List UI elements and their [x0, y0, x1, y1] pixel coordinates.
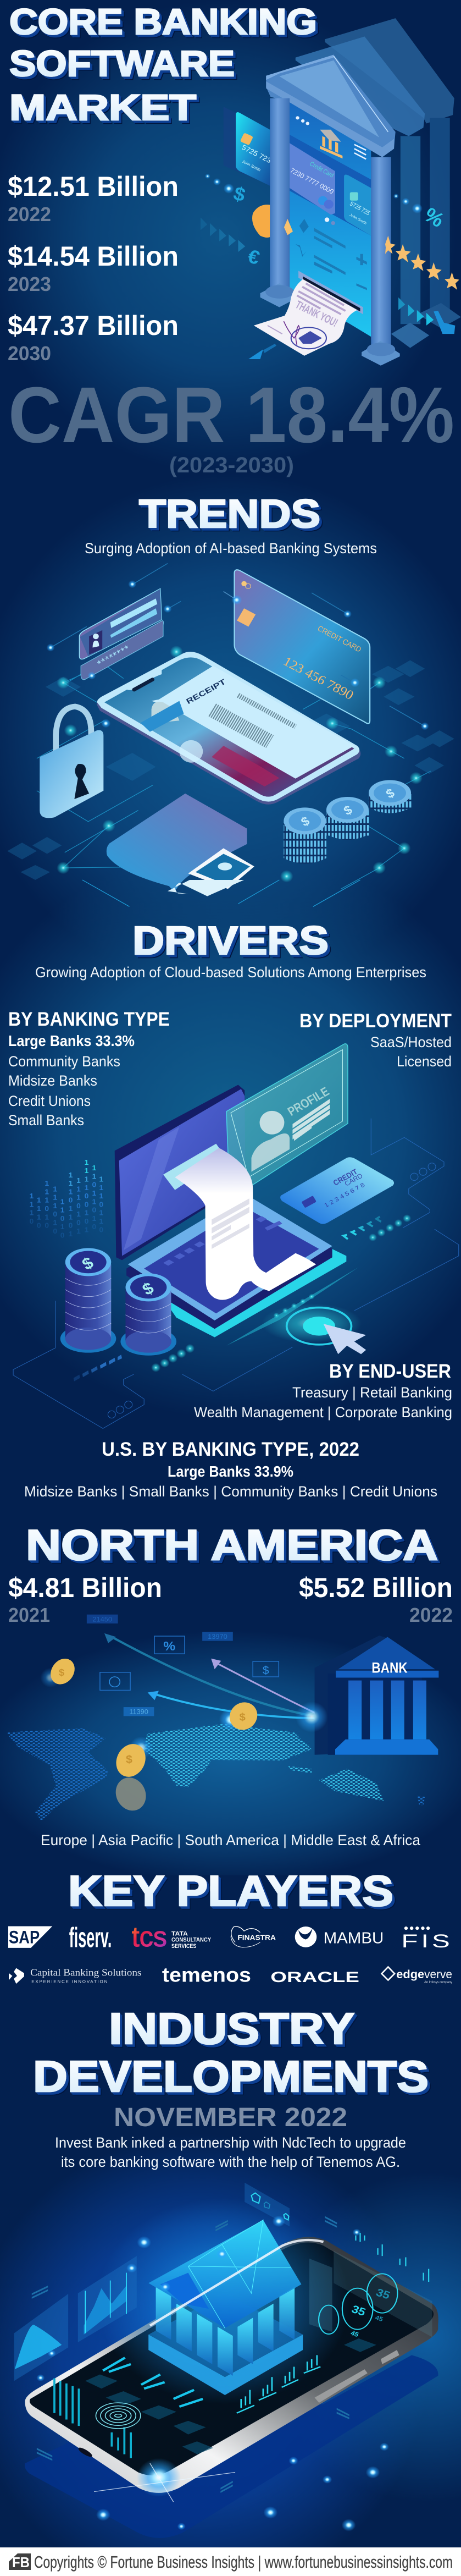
logo: EdgeVerve: verve	[424, 1967, 452, 1981]
regions list: Europe | Asia Pacific | South America | Middle East & Africa	[41, 1832, 420, 1848]
value 2030	[8, 310, 179, 365]
value 2022: $5.52 Billion	[299, 1572, 453, 1603]
binary data columns: 1	[45, 1196, 49, 1204]
binary data columns: 0	[76, 1219, 81, 1226]
binary data columns: 1	[30, 1192, 34, 1200]
binary data columns: 1	[30, 1201, 34, 1208]
dial gauges right: 35	[374, 2287, 392, 2302]
padlock	[40, 707, 103, 818]
binary data columns: 1	[69, 1188, 73, 1196]
segment: by banking type: Community Banks	[8, 1053, 120, 1070]
binary data columns: 1	[85, 1166, 89, 1175]
value 2021: 2021	[8, 1604, 50, 1626]
binary data columns: 1	[37, 1196, 41, 1204]
binary data columns: 1	[76, 1193, 81, 1202]
screen bars and fingerprint	[54, 2358, 203, 2458]
company logos	[8, 1922, 453, 1986]
gold coins	[40, 1654, 328, 1815]
icon: percent sign: %	[420, 203, 448, 232]
back temple	[325, 18, 461, 328]
data tags: %	[163, 1639, 175, 1654]
logo: Mambu	[295, 1927, 384, 1947]
holographic bank	[148, 2220, 303, 2395]
binary data columns: 1	[53, 1193, 58, 1202]
value 2023: 2023	[8, 273, 51, 295]
binary data columns: 1	[76, 1176, 81, 1185]
gold coins: $	[240, 1711, 246, 1723]
hash marks	[32, 2216, 349, 2493]
heading: trends: TRENDS	[139, 492, 320, 536]
dots under coins	[74, 1344, 195, 1381]
segment: by end-user: Wealth Management | Corporate Banking	[194, 1404, 452, 1421]
credit card: 1 2 3 4 5 6 7 8	[323, 1182, 366, 1209]
tech outlines	[13, 1119, 459, 1428]
binary data columns: 1	[92, 1214, 97, 1223]
icon: gold coin	[252, 205, 270, 238]
heading: drivers: DRIVERS	[132, 919, 329, 963]
hologram glow	[97, 2198, 350, 2404]
value 2023	[8, 241, 179, 295]
data tags: $	[263, 1664, 269, 1677]
phone shadow	[25, 2355, 438, 2538]
dial gauges right: 45	[349, 2329, 360, 2338]
wallet	[107, 794, 254, 890]
data tags	[87, 1615, 279, 1716]
binary data columns: 0	[99, 1201, 103, 1208]
bank screen: 7230 7777 0000	[289, 167, 335, 196]
wallet banknotes	[82, 880, 360, 906]
credit card: 123 456 7890	[281, 654, 356, 703]
phone edge highlight	[150, 2240, 324, 2326]
title	[9, 1, 317, 128]
laptop screen	[115, 1085, 246, 1260]
CAGR figure: (2023-2030)	[169, 453, 294, 477]
value 2023: $14.54 Billion	[8, 241, 179, 272]
binary data columns: 1	[76, 1210, 81, 1218]
heading: industry developments: DEVELOPMENTS	[33, 2052, 429, 2101]
illustration: world map, bank and coins	[6, 1615, 438, 1821]
segment: by deployment: SaaS/Hosted	[370, 1034, 452, 1050]
binary data columns: 0	[30, 1217, 34, 1225]
binary data columns: 1	[45, 1213, 49, 1221]
stack 2: $	[341, 802, 355, 818]
binary data columns: 0	[37, 1221, 41, 1230]
footer	[0, 2547, 461, 2576]
value 2022: 2022	[8, 203, 51, 225]
logo: Capital Banking Solutions: EXPERIENCE INNOVATION	[31, 1979, 108, 1984]
logo: FIS	[401, 1927, 453, 1952]
binary data columns: 1	[37, 1213, 41, 1221]
decorative tiles	[7, 660, 454, 880]
logo: FIS: FIS	[401, 1930, 453, 1952]
binary data columns: 0	[85, 1201, 88, 1208]
coin stacks	[284, 780, 412, 863]
small card	[224, 107, 273, 186]
bank building: BANK	[371, 1659, 408, 1676]
binary data columns: 1	[99, 1209, 104, 1217]
illustration: smartphone with holographic bank	[14, 2183, 438, 2538]
logo: TCS	[132, 1922, 212, 1952]
binary data columns: 1	[30, 1209, 34, 1217]
binary data columns: 1	[92, 1164, 97, 1172]
value 2030: 2030	[8, 342, 51, 365]
circuit lines	[37, 664, 431, 889]
title: SOFTWARE	[9, 43, 235, 84]
arrow: bottom left	[248, 344, 276, 359]
binary data columns: 1	[69, 1213, 73, 1221]
development text: its core banking software with the help of Tenemos AG.	[61, 2154, 400, 2170]
receipt: THANK YOU!	[293, 299, 340, 329]
binary data columns: 1	[85, 1158, 89, 1166]
segment: by banking type	[8, 1009, 170, 1129]
value 2022: 2022	[409, 1604, 453, 1626]
value 2021: $4.81 Billion	[8, 1572, 162, 1603]
small card: 5725 723	[240, 143, 273, 164]
binary data columns: 0	[53, 1227, 57, 1235]
bank screen: Credit Card	[308, 161, 335, 179]
hexagons on screen	[85, 2338, 376, 2454]
data tags: 21450	[92, 1616, 112, 1623]
binary data columns: 1	[85, 1184, 89, 1192]
bank screen: John Smith	[349, 213, 368, 225]
logo: EdgeVerve	[382, 1967, 453, 1984]
binary data columns: 1	[53, 1219, 58, 1226]
data tags: 13970	[208, 1633, 227, 1641]
binary data columns: 1	[99, 1217, 104, 1225]
binary data columns: 0	[45, 1221, 49, 1230]
binary data columns: 0	[60, 1214, 64, 1223]
development text: Invest Bank inked a partnership with NdcTech to upgrade	[55, 2134, 406, 2151]
right column	[362, 157, 400, 366]
binary data columns: 1	[99, 1192, 104, 1200]
smartphone	[97, 652, 360, 805]
binary data columns: 0	[92, 1206, 96, 1214]
logo: EdgeVerve: An Infosys company	[424, 1980, 453, 1984]
stack 2	[326, 797, 369, 840]
binary data columns: 0	[76, 1202, 81, 1210]
coin stack 2	[120, 1273, 176, 1356]
bank building	[315, 1636, 438, 1755]
footer logo: FB	[12, 2554, 30, 2571]
coin stack 1	[60, 1248, 116, 1353]
middle temple	[296, 36, 429, 348]
gold coins: $	[126, 1754, 132, 1766]
development date: NOVEMBER 2022	[114, 2103, 347, 2132]
binary data columns: 1	[85, 1209, 89, 1217]
credit card: CARD	[343, 1172, 364, 1188]
chevrons and dots right	[343, 1214, 411, 1241]
segment: U.S. by banking type: U.S. BY BANKING TYPE, 2022	[102, 1439, 359, 1460]
pediment roof	[266, 54, 396, 157]
illustration: bank with phone screen	[201, 18, 461, 366]
logo: SAP: SAP	[9, 1928, 40, 1947]
dial gauges right	[309, 2233, 432, 2338]
logo: EdgeVerve: edge	[396, 1967, 424, 1981]
icon: shopping cart	[434, 311, 455, 334]
bank screen	[289, 102, 371, 337]
light dots	[36, 2216, 389, 2531]
binary data columns: 0	[92, 1181, 96, 1189]
illustration: laptop with receipt and profile	[13, 1044, 459, 1428]
binary data columns: 1	[69, 1179, 73, 1187]
binary data columns: 1	[45, 1188, 49, 1196]
heading: industry developments	[33, 2004, 429, 2101]
dots	[296, 116, 309, 125]
molecule panel	[245, 2183, 290, 2226]
binary data columns: 0	[85, 1192, 88, 1200]
binary data columns: 1	[99, 1184, 104, 1192]
chart panels left	[14, 2256, 137, 2381]
triangle arrows	[201, 217, 434, 326]
side buttons	[77, 2350, 399, 2458]
segment: by end-user	[194, 1361, 452, 1421]
binary data columns: 0	[92, 1223, 96, 1231]
binary data columns: 0	[45, 1204, 49, 1213]
coin stack 1: $	[79, 1254, 97, 1274]
laptop base	[126, 1194, 346, 1337]
phone screen	[30, 2243, 434, 2475]
logo: Capital Banking Solutions: Capital Banking Solutions	[30, 1967, 141, 1978]
binary data columns: 1	[69, 1171, 73, 1179]
value 2022	[8, 171, 179, 225]
stack 3	[369, 780, 412, 813]
binary data columns: 1	[85, 1175, 89, 1183]
icon: euro sign: €	[246, 245, 262, 269]
north america values	[8, 1572, 453, 1626]
binary data columns: 0	[60, 1231, 64, 1239]
binary data columns: 1	[69, 1204, 73, 1213]
segment: by end-user: BY END-USER	[329, 1361, 451, 1382]
binary data columns: 1	[45, 1179, 49, 1187]
title: MARKET	[9, 87, 196, 128]
logo: Oracle: ORACLE	[270, 1969, 359, 1985]
bank screen: 5725 725	[348, 201, 371, 217]
data tags: 11390	[129, 1708, 148, 1715]
segment: U.S. by banking type: Large Banks 33.9%	[168, 1463, 293, 1480]
value 2021	[8, 1572, 162, 1626]
binary data columns: 1	[76, 1185, 81, 1193]
credit card: CREDIT CARD	[316, 624, 363, 654]
phone body	[25, 2237, 438, 2493]
title: CORE BANKING	[9, 1, 317, 42]
logo: fiserv: fiserv.	[69, 1922, 112, 1953]
logo: TCS: tcs	[132, 1922, 167, 1952]
login panel: ********	[96, 643, 132, 669]
logo: temenos: temenos	[162, 1963, 251, 1986]
logo: TCS: SERVICES	[171, 1943, 196, 1950]
smartphone: RECEIPT	[185, 677, 227, 706]
dial gauges right: 35	[350, 2303, 368, 2319]
segment: by end-user: Treasury | Retail Banking	[292, 1384, 452, 1401]
small bar charts	[237, 2355, 320, 2413]
logo: Finastra	[231, 1927, 276, 1947]
profile panel	[226, 1044, 348, 1191]
credit card: CREDIT	[331, 1167, 359, 1187]
left column	[260, 98, 300, 307]
segment: by banking type: BY BANKING TYPE	[8, 1009, 170, 1030]
stack 1	[284, 807, 326, 863]
login panel	[79, 588, 163, 680]
world map dots	[6, 1724, 425, 1821]
segment: by banking type: Midsize Banks	[8, 1072, 97, 1089]
beam and cursor	[226, 1267, 366, 1354]
coin stack 2: $	[140, 1279, 157, 1299]
icon: dollar sign: $	[231, 183, 248, 206]
receipt ribbon	[163, 1144, 316, 1300]
heading: industry developments: INDUSTRY	[109, 2004, 354, 2053]
drivers text: Growing Adoption of Cloud-based Solutions Among Enterprises	[35, 964, 426, 981]
segment: by banking type: Large Banks 33.3%	[8, 1032, 135, 1049]
binary data columns: 1	[69, 1230, 73, 1238]
light nodes	[47, 563, 429, 883]
binary data columns: 0	[69, 1196, 73, 1204]
binary data columns: 0	[69, 1221, 73, 1230]
binary data columns: 1	[92, 1189, 97, 1197]
logo: Capital Banking Solutions	[9, 1967, 141, 1984]
illustration: receipt phone, card, lock, wallet, coins	[7, 563, 454, 890]
binary data columns: 0	[85, 1217, 88, 1225]
stack 3: $	[384, 785, 397, 801]
heading: north america: NORTH AMERICA	[26, 1521, 438, 1569]
binary data columns: 1	[92, 1198, 97, 1206]
trend text: Surging Adoption of AI-based Banking Systems	[85, 540, 377, 557]
segment: by deployment	[299, 1010, 452, 1070]
logo: TCS: TATA	[171, 1931, 188, 1937]
binary data columns	[30, 1158, 104, 1239]
profile panel: PROFILE	[285, 1084, 331, 1119]
segment: by deployment: Licensed	[397, 1053, 452, 1070]
value 2030: $47.37 Billion	[8, 310, 179, 341]
small card: John Smith	[241, 159, 262, 172]
stack 1: $	[298, 813, 312, 829]
icon: bank glyph	[320, 130, 342, 158]
segment: by banking type: Small Banks	[8, 1112, 84, 1129]
logo: Finastra: FINASTRA	[237, 1934, 276, 1941]
icon: stars	[385, 236, 459, 290]
segment: by deployment: BY DEPLOYMENT	[299, 1010, 452, 1032]
logo: TCS: CONSULTANCY	[171, 1937, 212, 1944]
receipt	[254, 279, 357, 356]
segment: by banking type: Credit Unions	[8, 1093, 91, 1109]
binary data columns: 1	[53, 1185, 58, 1193]
development text	[55, 2134, 406, 2170]
binary data columns: 1	[85, 1226, 89, 1234]
binary data columns: 1	[60, 1198, 65, 1206]
binary data columns: 1	[60, 1223, 65, 1231]
heading: key players: KEY PLAYERS	[68, 1867, 393, 1915]
binary data columns: 1	[53, 1202, 58, 1210]
arrows	[112, 1637, 326, 1718]
light dots	[205, 174, 423, 213]
binary data columns: 0	[53, 1210, 57, 1218]
segment: U.S. by banking type	[24, 1439, 437, 1500]
credit card	[234, 570, 370, 724]
credit card	[280, 1157, 394, 1224]
dial gauges right: 45	[374, 2314, 384, 2323]
binary data columns: 1	[37, 1204, 41, 1213]
binary data columns: 0	[99, 1226, 103, 1234]
logo: Mambu: MAMBU	[324, 1930, 384, 1947]
binary data columns: 1	[76, 1227, 81, 1235]
value 2022	[299, 1572, 453, 1626]
binary data columns: 1	[92, 1173, 97, 1180]
market size values	[8, 171, 179, 365]
binary data columns: 1	[99, 1175, 104, 1183]
gold coins: $	[59, 1667, 64, 1678]
binary data columns: 1	[60, 1206, 65, 1214]
value 2022: $12.51 Billion	[8, 171, 179, 202]
segment: U.S. by banking type: Midsize Banks | Small Banks | Community Banks | Credit Unions	[24, 1483, 437, 1500]
